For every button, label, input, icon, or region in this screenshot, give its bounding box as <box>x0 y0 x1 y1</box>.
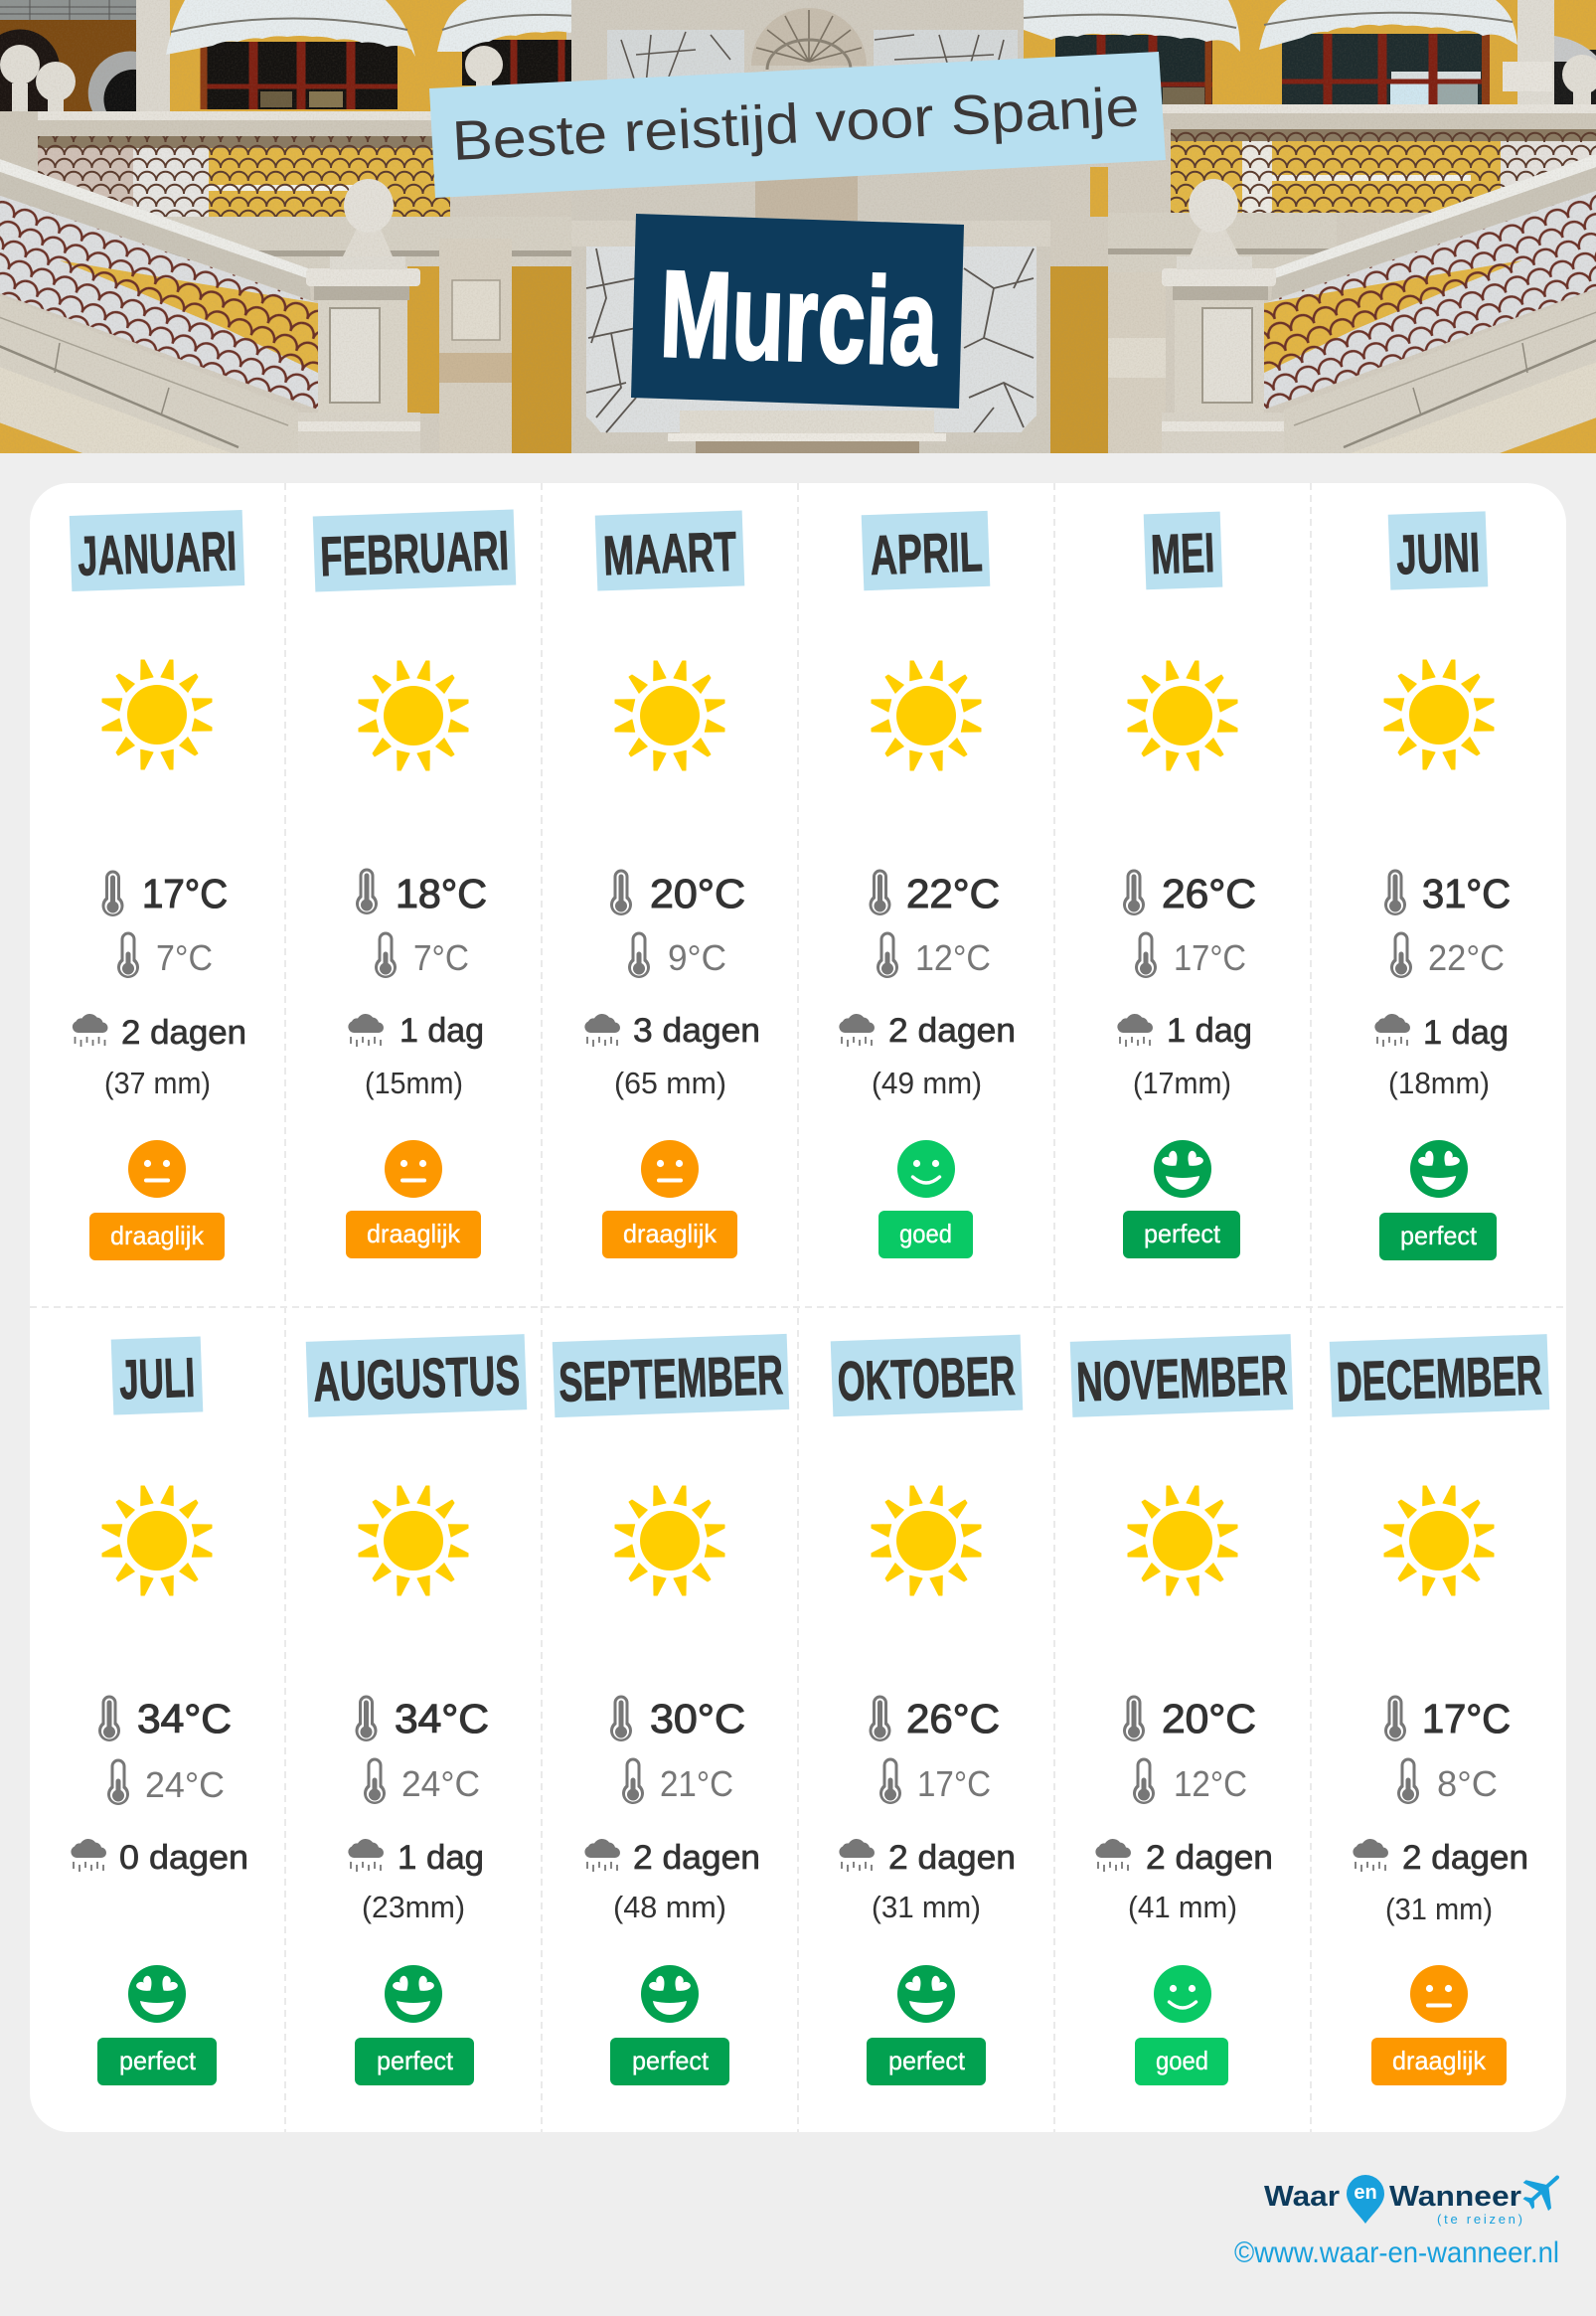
rainfall: (48 mm) <box>613 1890 726 1924</box>
stone texture <box>0 0 1596 453</box>
rating badge: perfect <box>632 2046 710 2075</box>
max temperature <box>1384 869 1511 916</box>
max temperature: 17°C <box>1422 1696 1511 1741</box>
rating badge: goed <box>899 1219 952 1248</box>
window second <box>462 40 596 85</box>
shell fan <box>751 8 867 70</box>
rating face <box>128 1140 186 1198</box>
rain days: 3 dagen <box>633 1012 760 1050</box>
rainfall: (18mm) <box>1388 1066 1490 1100</box>
rain days: 1 dag <box>1167 1012 1252 1050</box>
rating badge: draaglijk <box>110 1221 205 1250</box>
month label <box>306 1334 527 1417</box>
rating badge: perfect <box>888 2046 966 2075</box>
stone pillar left <box>136 0 170 111</box>
top left brick wall <box>0 0 139 111</box>
max temperature: 18°C <box>396 871 487 916</box>
website credit: ©www.waar-en-wanneer.nl <box>1234 2236 1559 2269</box>
min temperature: 21°C <box>660 1763 733 1804</box>
min temperature <box>879 1757 991 1804</box>
min temperature: 7°C <box>413 937 469 978</box>
rain days <box>1095 1839 1273 1877</box>
balustrade left <box>0 111 447 171</box>
rating badge <box>346 1211 481 1258</box>
month: maart <box>584 510 760 1258</box>
min temperature: 7°C <box>156 937 213 978</box>
min temperature: 17°C <box>1174 937 1246 978</box>
max temperature <box>356 1696 489 1741</box>
rating badge <box>602 1211 737 1258</box>
balustrade right <box>1161 104 1596 129</box>
icon: sun <box>1128 1486 1237 1595</box>
min temperature: 24°C <box>401 1763 480 1804</box>
window right A <box>1055 35 1212 104</box>
min temperature: 12°C <box>915 937 991 978</box>
max temperature: 26°C <box>1162 871 1256 916</box>
rating badge <box>97 2038 217 2085</box>
rating badge <box>1135 2038 1228 2085</box>
max temperature <box>1123 869 1256 916</box>
month label <box>1070 1334 1293 1417</box>
month label: MAART <box>602 520 737 586</box>
rain days <box>839 1012 1016 1050</box>
max temperature: 34°C <box>137 1696 232 1741</box>
rating face <box>1154 1140 1211 1198</box>
stone pilaster right <box>1108 224 1166 453</box>
rating badge <box>1371 2038 1507 2085</box>
min temperature <box>1135 932 1246 978</box>
max temperature <box>869 869 1000 916</box>
month: juli <box>71 1336 248 2085</box>
logo word Waar: Waar <box>1264 2181 1340 2213</box>
icon: map pin: en <box>1354 2182 1377 2204</box>
icon: sun <box>872 1486 981 1595</box>
max temperature <box>101 871 228 916</box>
icon: sun <box>359 661 468 770</box>
month label: OKTOBER <box>837 1344 1017 1412</box>
ball finial right <box>1562 55 1596 107</box>
rain days <box>1374 1014 1509 1052</box>
month label <box>70 510 244 591</box>
rating badge: perfect <box>119 2046 197 2075</box>
min temperature <box>1397 1757 1498 1804</box>
rain days <box>839 1839 1016 1877</box>
month: januari <box>70 510 246 1260</box>
month: juni <box>1374 511 1511 1260</box>
month: december <box>1330 1334 1549 2085</box>
rain days <box>348 1839 484 1877</box>
rating badge: perfect <box>1400 1221 1478 1250</box>
month: mei <box>1117 512 1256 1258</box>
month label <box>595 510 744 591</box>
month: februari <box>313 509 516 1258</box>
month label: AUGUSTUS <box>312 1343 521 1413</box>
min temperature <box>1133 1757 1247 1804</box>
fountain basin <box>571 403 1050 453</box>
rain days: 2 dagen <box>633 1839 760 1877</box>
title banner <box>429 52 1166 198</box>
rating badge <box>89 1213 225 1260</box>
rating face <box>385 1965 442 2023</box>
city banner <box>631 214 964 409</box>
yellow strip center left <box>512 266 571 453</box>
month: september <box>553 1334 789 2085</box>
max temperature <box>610 869 745 916</box>
upper right wall <box>1024 0 1596 105</box>
max temperature <box>610 1696 745 1741</box>
min temperature <box>364 1757 480 1804</box>
rain days: 1 dag <box>399 1012 484 1050</box>
mosaic top <box>607 30 1018 89</box>
rainfall: (17mm) <box>1133 1066 1231 1100</box>
month label: MEI <box>1150 521 1215 585</box>
railing right <box>1171 129 1596 213</box>
max temperature: 17°C <box>142 871 228 916</box>
min temperature <box>1390 932 1505 978</box>
rating badge <box>355 2038 474 2085</box>
icon: map pin <box>1347 2175 1384 2224</box>
rainfall: (65 mm) <box>614 1066 726 1100</box>
max temperature <box>356 869 487 916</box>
yellow upper wall <box>169 0 566 111</box>
rating face <box>641 1140 699 1198</box>
icon: sun <box>615 661 724 770</box>
icon: sun <box>102 1486 212 1595</box>
icon: sun <box>1384 660 1494 769</box>
month label: APRIL <box>870 520 984 586</box>
rain days: 2 dagen <box>1146 1839 1273 1877</box>
min temperature <box>107 1759 225 1805</box>
staircase left <box>0 152 420 453</box>
rating face <box>897 1965 955 2023</box>
logo: Waar en Wanneer <box>1264 2162 1571 2227</box>
rating badge <box>1379 1213 1497 1260</box>
window left <box>202 42 398 109</box>
month: oktober <box>831 1335 1023 2085</box>
icon: sun <box>872 661 981 770</box>
month label: NOVEMBER <box>1075 1343 1288 1413</box>
rating badge: draaglijk <box>367 1219 461 1248</box>
max temperature: 26°C <box>906 1696 1000 1741</box>
awning right B <box>1259 0 1517 50</box>
icon: airplane <box>1515 2162 1571 2219</box>
min temperature: 12°C <box>1174 1763 1247 1804</box>
rainfall: (41 mm) <box>1128 1890 1237 1924</box>
month: november <box>1070 1334 1293 2085</box>
max temperature <box>98 1696 232 1741</box>
rainfall: (49 mm) <box>872 1066 982 1100</box>
rain days: 2 dagen <box>888 1839 1016 1877</box>
min temperature: 9°C <box>668 937 726 978</box>
max temperature: 31°C <box>1422 871 1511 916</box>
min temperature: 22°C <box>1428 937 1505 978</box>
min temperature <box>877 932 991 978</box>
month label <box>553 1334 789 1417</box>
icon: sun <box>102 660 212 769</box>
rainfall: (15mm) <box>365 1066 463 1100</box>
stone pilaster left <box>439 239 512 453</box>
rating badge <box>867 2038 986 2085</box>
horizontal stone ledge left <box>169 217 596 268</box>
rating badge <box>610 2038 729 2085</box>
horizontal stone ledge right <box>1108 213 1337 272</box>
month label: JUNI <box>1395 521 1481 585</box>
rain days: 1 dag <box>1423 1014 1509 1052</box>
rain days <box>1117 1012 1252 1050</box>
min temperature: 8°C <box>1437 1763 1498 1804</box>
rain days: 2 dagen <box>121 1014 246 1052</box>
max temperature: 20°C <box>1162 1696 1256 1741</box>
min temperature <box>117 932 213 978</box>
yellow strip left <box>407 266 440 414</box>
rain days: 2 dagen <box>1402 1839 1528 1877</box>
hero photo: stone staircase <box>0 0 1596 453</box>
rating face <box>128 1965 186 2023</box>
city banner: Murcia <box>658 246 940 392</box>
rating face <box>1410 1140 1468 1198</box>
month label: JANUARI <box>77 519 238 587</box>
center stone panel <box>571 0 1050 453</box>
icon: sun <box>359 1486 468 1595</box>
rainfall: (31 mm) <box>1385 1892 1493 1926</box>
rain days <box>348 1012 484 1050</box>
rating badge: draaglijk <box>623 1219 718 1248</box>
max temperature: 22°C <box>906 871 1000 916</box>
min temperature: 24°C <box>145 1764 225 1805</box>
rating face <box>1410 1965 1468 2023</box>
min temperature <box>628 932 726 978</box>
min temperature <box>375 932 469 978</box>
awning second <box>437 0 596 52</box>
min temperature: 17°C <box>917 1763 991 1804</box>
month: april <box>839 511 1016 1258</box>
rating face <box>1154 1965 1211 2023</box>
rain days: 1 dag <box>398 1839 484 1877</box>
max temperature <box>1123 1696 1256 1741</box>
railing left <box>38 136 450 217</box>
awning left <box>166 0 415 57</box>
yellow patch right <box>1090 167 1108 217</box>
rating face <box>641 1965 699 2023</box>
rain days <box>584 1012 760 1050</box>
month label: FEBRUARI <box>319 519 510 587</box>
month label: SEPTEMBER <box>558 1343 784 1413</box>
panel: monthly weather card <box>30 483 1566 2132</box>
max temperature: 34°C <box>395 1696 489 1741</box>
rating face <box>897 1140 955 1198</box>
icon: sun <box>1384 1486 1494 1595</box>
icon: sun <box>615 1486 724 1595</box>
logo tagline: (te reizen) <box>1437 2212 1522 2227</box>
rating face <box>385 1140 442 1198</box>
awning right A <box>1024 0 1240 52</box>
rainfall: (37 mm) <box>104 1066 211 1100</box>
staircase right <box>1162 152 1596 453</box>
mosaic cracks <box>586 248 1034 432</box>
max temperature <box>1384 1696 1511 1741</box>
rating badge: goed <box>1156 2046 1208 2075</box>
rain days: 0 dagen <box>119 1839 248 1877</box>
rating badge <box>1123 1211 1240 1258</box>
max temperature: 20°C <box>650 871 745 916</box>
rain days <box>584 1839 760 1877</box>
max temperature: 30°C <box>650 1696 745 1741</box>
min temperature <box>622 1757 733 1804</box>
rating badge: perfect <box>1144 1219 1221 1248</box>
title banner: Beste reistijd voor Spanje <box>450 75 1141 172</box>
rainfall: (23mm) <box>362 1890 465 1924</box>
rating badge <box>878 1211 973 1258</box>
rainfall: (31 mm) <box>872 1890 981 1924</box>
month: augustus <box>306 1334 527 2085</box>
stone pillar right <box>1503 0 1596 105</box>
max temperature <box>869 1696 1000 1741</box>
yellow strip center right <box>1050 266 1110 453</box>
logo word Wanneer: Wanneer <box>1389 2181 1521 2213</box>
month label <box>831 1335 1023 1416</box>
month label <box>862 511 990 590</box>
rain days: 2 dagen <box>888 1012 1016 1050</box>
month label <box>313 509 516 592</box>
month label <box>1144 512 1222 589</box>
rain days <box>71 1839 248 1877</box>
month label: JULI <box>118 1346 196 1410</box>
icon: sun <box>1128 661 1237 770</box>
rain days <box>1353 1839 1528 1877</box>
window right B <box>1282 34 1489 104</box>
month label <box>1388 511 1488 590</box>
month label <box>111 1336 203 1415</box>
ball finials left <box>0 45 503 113</box>
rating badge: perfect <box>377 2046 454 2075</box>
rating badge: draaglijk <box>1392 2046 1487 2075</box>
